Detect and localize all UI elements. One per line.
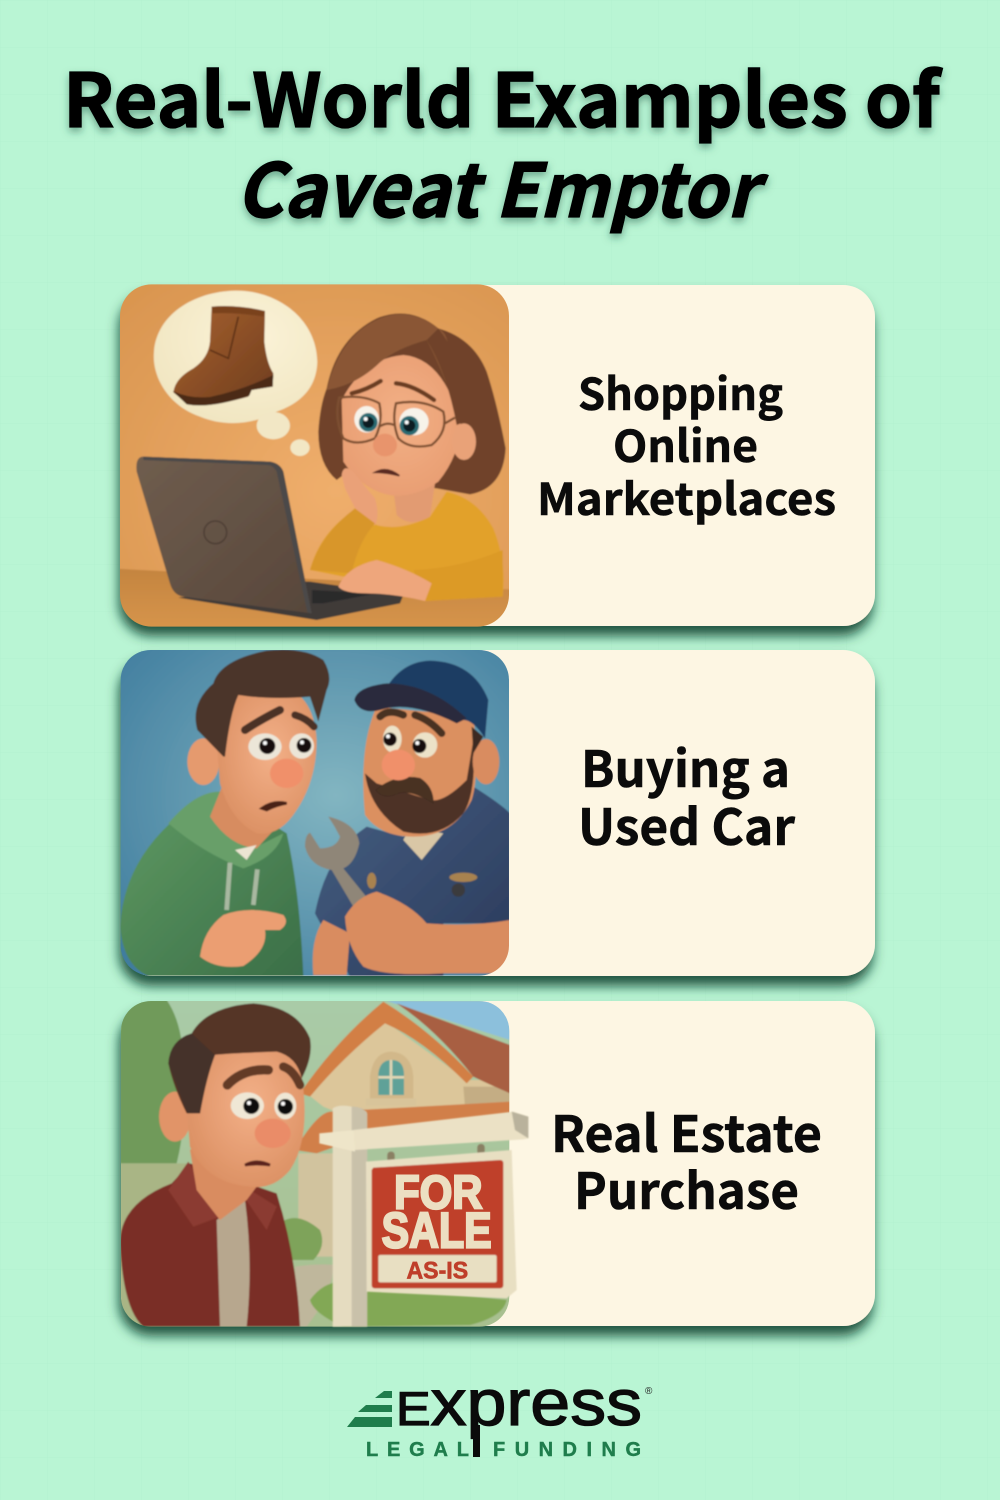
illustration: woman at laptop thinking of a boot	[110, 275, 520, 635]
icon: speed stripes	[347, 1391, 392, 1427]
label: Shopping Online Marketplaces: Marketplaces	[537, 464, 836, 528]
title: Caveat Emptor	[236, 132, 768, 239]
label: Buying a Used Car	[578, 730, 795, 860]
label: Real Estate Purchase: Purchase	[574, 1152, 799, 1224]
label: Buying a Used Car: Buying a	[581, 730, 790, 802]
label: Shopping Online Marketplaces: Shopping	[578, 359, 783, 423]
man	[120, 1003, 311, 1327]
icon: wrench	[305, 817, 372, 907]
title: Real-World Examples of	[63, 42, 943, 149]
for sale sign: SALE	[382, 1203, 492, 1259]
wordmark: Express: Express	[396, 1366, 642, 1439]
sign arm	[353, 1112, 528, 1150]
panel: real estate purchase	[110, 990, 875, 1340]
wordmark: Legal Funding	[366, 1439, 641, 1461]
thought bubble	[154, 291, 317, 456]
card background	[121, 1001, 875, 1326]
wordmark: Legal Funding: LEGAL	[366, 1439, 469, 1461]
panel: shopping online marketplaces	[110, 275, 875, 635]
for sale sign: FOR	[394, 1166, 482, 1219]
woman	[310, 313, 506, 601]
card background	[121, 285, 875, 626]
mechanic hand and forearm	[345, 892, 510, 974]
for sale sign: AS-IS	[406, 1258, 468, 1285]
logo: Express Legal Funding: ®	[645, 1386, 653, 1397]
label: Buying a Used Car: Used Car	[578, 788, 795, 860]
wordmark: Legal Funding: FUNDING	[493, 1439, 641, 1461]
sign post	[333, 1106, 367, 1327]
for sale sign	[319, 1106, 528, 1327]
illustration: buyer in front of house	[121, 1001, 510, 1327]
icon: boot	[173, 306, 273, 406]
buyer	[120, 650, 329, 977]
sign board	[366, 1150, 517, 1298]
panel: buying a used car	[110, 640, 875, 985]
mechanic	[313, 661, 510, 977]
label: Real Estate Purchase: Real Estate	[551, 1095, 822, 1167]
label: Real Estate Purchase	[551, 1095, 822, 1224]
hand on keyboard	[338, 560, 432, 601]
card background	[121, 650, 875, 976]
label: Shopping Online Marketplaces: Online	[613, 411, 758, 475]
illustration: buyer and mechanic with wrench	[120, 650, 509, 976]
house	[280, 1002, 510, 1327]
laptop	[136, 457, 403, 620]
label: Shopping Online Marketplaces	[537, 359, 836, 528]
logo: Express Legal Funding	[347, 1366, 653, 1461]
title	[63, 42, 943, 239]
